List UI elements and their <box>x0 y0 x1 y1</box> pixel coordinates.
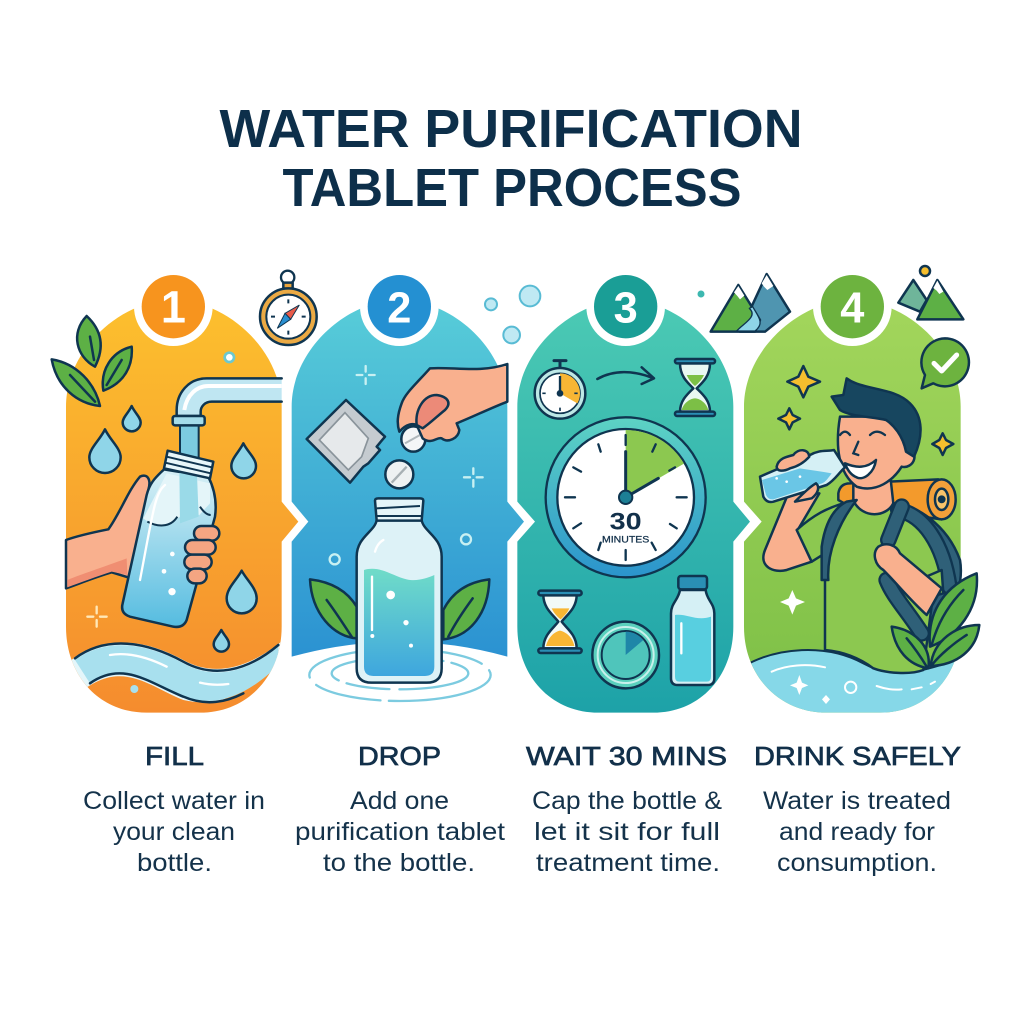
step 2 text: DROP <box>358 741 441 771</box>
icon: check bubble <box>921 338 969 388</box>
step 3 text: WAIT 30 MINS <box>526 741 727 771</box>
badge 4 <box>813 267 892 346</box>
backpack <box>883 503 961 637</box>
step 1 text: Collect water in <box>83 787 265 815</box>
badge 2 <box>360 267 439 346</box>
step 4 text: consumption. <box>777 849 937 877</box>
title: TABLET PROCESS <box>282 158 742 218</box>
step 1 text: FILL <box>145 741 204 771</box>
icon: water drops <box>89 406 257 652</box>
icon: jar with water <box>357 498 442 683</box>
icon: fingers on bottle <box>184 526 219 583</box>
icon: small progress dial <box>592 622 659 688</box>
bottle held <box>760 450 845 502</box>
step 1 text: your clean <box>113 818 235 846</box>
step 2 text: purification tablet <box>295 818 505 846</box>
badge 4: 4 <box>840 284 864 332</box>
icon: small capped bottle <box>671 576 714 685</box>
bedroll <box>838 479 956 519</box>
badge 2: 2 <box>387 284 411 332</box>
sleeve <box>918 570 943 597</box>
badge 3: 3 <box>614 284 638 332</box>
river <box>60 640 283 702</box>
step 4 text: Water is treated <box>763 787 951 815</box>
step 3 text <box>526 741 727 877</box>
icon: water ripples <box>309 649 491 701</box>
badge 1: 1 <box>161 282 186 333</box>
icon: tap with stream <box>173 378 282 468</box>
title: WATER PURIFICATION <box>220 99 802 159</box>
panel background 2 <box>292 300 524 657</box>
panel: step 1 fill <box>52 267 298 713</box>
panel: step 2 drop <box>292 267 524 701</box>
step 3 text: Cap the bottle & <box>532 787 722 815</box>
panel: step 3 wait <box>517 267 750 713</box>
step 1 text: bottle. <box>137 849 212 877</box>
shirt <box>797 501 945 673</box>
step 1 text <box>83 741 265 877</box>
badge 1 <box>134 267 213 346</box>
step 3 text: let it sit for full <box>534 818 720 846</box>
neck <box>853 473 893 517</box>
step 4 text <box>754 741 961 877</box>
person drinking <box>760 378 961 673</box>
icon: sparkle and dot <box>87 353 234 627</box>
icon: compass <box>260 271 317 345</box>
icon: falling tablet <box>385 460 413 488</box>
step 4 text: DRINK SAFELY <box>754 741 961 771</box>
icon: large 30 minute clock <box>546 417 706 577</box>
icon: bubbles <box>485 286 540 343</box>
step 2 text <box>295 741 505 877</box>
panel: step 4 drink <box>711 266 979 720</box>
icon: large 30 minute clock: 30 <box>610 508 642 535</box>
right arm on strap <box>875 544 942 615</box>
title <box>220 99 802 218</box>
icon: foreground leaves <box>892 573 979 668</box>
icon: hand dropping tablet <box>398 364 507 452</box>
icon: stopwatch <box>535 361 585 419</box>
hand on bottle <box>777 450 809 471</box>
left strap <box>822 500 857 580</box>
water at base <box>750 649 954 712</box>
arrow <box>597 367 654 384</box>
raised arm <box>763 493 819 571</box>
step 2 text: Add one <box>350 787 449 815</box>
icon: leaves <box>52 316 132 406</box>
icon: orange hourglass <box>538 591 582 653</box>
icon: stars <box>778 366 953 615</box>
icon: sparkles and rings <box>330 366 483 564</box>
icon: green hourglass <box>675 359 715 416</box>
icon: large 30 minute clock: MINUTES <box>602 534 649 544</box>
badge 3 <box>586 267 665 346</box>
step 3 text: treatment time. <box>536 849 720 877</box>
icon: leaves beside jar <box>310 579 489 639</box>
head <box>838 417 914 488</box>
right strap <box>887 507 949 633</box>
step 4 text: and ready for <box>779 818 935 846</box>
step 2 text: to the bottle. <box>323 849 475 877</box>
icon: mountains with river <box>711 274 790 332</box>
panel background 1 <box>66 300 298 713</box>
icon: hand holding bottle <box>66 476 153 588</box>
small teal dot <box>698 290 704 298</box>
icon: mountains with sun <box>898 266 963 319</box>
icon: tilted bottle <box>122 451 216 627</box>
panel background 4 <box>744 300 961 713</box>
panel background 3 <box>517 300 750 713</box>
icon: tablet sachet <box>307 400 385 483</box>
